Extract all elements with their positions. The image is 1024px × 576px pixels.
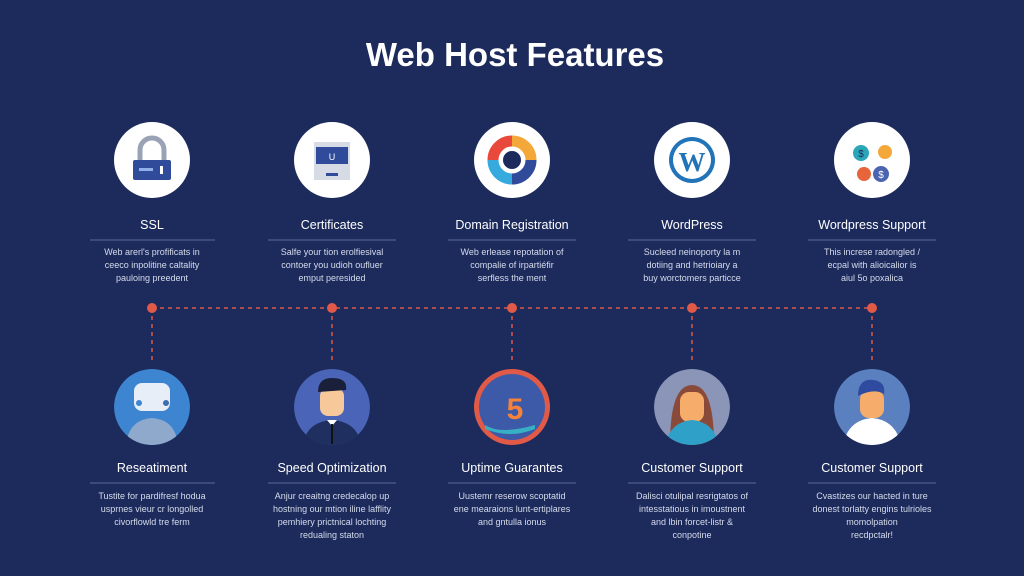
panel: Customer Support 1: Customer Support xyxy=(641,461,743,475)
icon: robot avatar xyxy=(114,369,190,450)
panel: SSL xyxy=(90,122,215,283)
panel: SSL: Web arerl's profificats in xyxy=(104,247,200,257)
timeline dots xyxy=(147,303,877,313)
panel: Reseatiment: civorflowld tre ferm xyxy=(114,517,190,527)
panel: Wordpress Support: Wordpress Support xyxy=(818,218,926,232)
panel: Speed Optimization: hostning our mtion iline lafflity xyxy=(273,504,391,514)
panel: Customer Support 1: Dalisci otulipal resrigtatos of xyxy=(636,491,749,501)
panel: SSL: SSL xyxy=(140,218,164,232)
timeline connector xyxy=(152,308,872,360)
panel: Domain Registration: compalie of irpartiéfir xyxy=(470,260,554,270)
icon: certificate xyxy=(294,122,370,198)
panel: Uptime Guarantes: and gntulla ionus xyxy=(478,517,547,527)
panel: Customer Support 2: Customer Support xyxy=(821,461,923,475)
panel: Domain Registration: Web erlease repotation of xyxy=(461,247,564,257)
icon: coins: $ xyxy=(878,170,884,181)
panel: Customer Support 1: conpotine xyxy=(672,530,712,540)
icon: wordpress logo xyxy=(654,122,730,198)
panel: WordPress xyxy=(628,122,756,283)
panel: Uptime Guarantes xyxy=(448,369,576,527)
panel: Reseatiment: usprnes vieur cr longolled xyxy=(101,504,203,514)
panel: Customer Support 2: momolpation xyxy=(846,517,898,527)
panel: Certificates: Certificates xyxy=(301,218,363,232)
panel: Domain Registration: serfless the ment xyxy=(478,273,547,283)
panel: Speed Optimization: pemhiery prictnical lochting xyxy=(278,517,386,527)
panel: Customer Support 2: Cvastizes our hacted in ture xyxy=(816,491,928,501)
panel: Reseatiment: Tustite for pardifresf hodua xyxy=(98,491,206,501)
panel: Wordpress Support: aiul 5o poxalica xyxy=(841,273,903,283)
panel: Uptime Guarantes: Uustemr reserow scoptatid xyxy=(458,491,566,501)
icon: man avatar xyxy=(834,369,910,450)
icon: coins xyxy=(834,122,910,198)
panel: WordPress: dotiing and hetrioiary a xyxy=(646,260,738,270)
panel: WordPress: WordPress xyxy=(661,218,723,232)
icon: uptime badge: 5 xyxy=(507,393,523,426)
panel: Wordpress Support: This increse radongled / xyxy=(824,247,921,257)
title: Web Host Features xyxy=(366,36,664,73)
icon: woman avatar xyxy=(654,369,730,450)
panel: Wordpress Support xyxy=(808,122,936,283)
icon: lock xyxy=(114,122,190,198)
panel: WordPress: buy worctomers particce xyxy=(643,273,741,283)
panel: Customer Support 2: recdpctalr! xyxy=(851,530,893,540)
icon: coins: $ xyxy=(858,149,864,160)
panel: Domain Registration xyxy=(448,122,576,283)
panel: SSL: ceeco inpolitine caltality xyxy=(105,260,200,270)
icon: donut chart xyxy=(474,122,550,198)
icon: certificate: U xyxy=(329,152,335,162)
panel: Speed Optimization: Anjur creaitng credecalop up xyxy=(275,491,389,501)
panel: Certificates xyxy=(268,122,396,283)
panel: Certificates: Salfe your tion erolfiesival xyxy=(281,247,383,257)
panel: SSL: pauloing preedent xyxy=(116,273,189,283)
panel: Speed Optimization: Speed Optimization xyxy=(277,461,387,475)
panel: Reseatiment xyxy=(90,369,215,527)
panel: Domain Registration: Domain Registration xyxy=(455,218,569,232)
icon: businessman avatar xyxy=(294,369,370,450)
icon: wordpress logo: W xyxy=(678,147,706,177)
panel: Customer Support 2 xyxy=(808,369,936,540)
panel: Customer Support 1: intesstatious in imoustnent xyxy=(639,504,746,514)
panel: Speed Optimization xyxy=(268,369,396,540)
panel: Uptime Guarantes: Uptime Guarantes xyxy=(461,461,563,475)
panel: Customer Support 1 xyxy=(628,369,756,540)
icon: uptime badge xyxy=(474,369,550,445)
panel: WordPress: Sucleed neinoporty la m xyxy=(644,247,740,257)
panel: Reseatiment: Reseatiment xyxy=(117,461,188,475)
panel: Certificates: contoer you udioh oufluer xyxy=(281,260,383,270)
panel: Speed Optimization: redualing staton xyxy=(300,530,364,540)
panel: Wordpress Support: ecpal with alioicalior is xyxy=(827,260,917,270)
panel: Customer Support 1: and lbin forcet-listr & xyxy=(651,517,733,527)
panel: Customer Support 2: donest torlatty engins tulrioles xyxy=(812,504,932,514)
panel: Uptime Guarantes: ene mearaions lunt-ertiplares xyxy=(454,504,571,514)
panel: Certificates: emput peresided xyxy=(298,273,366,283)
